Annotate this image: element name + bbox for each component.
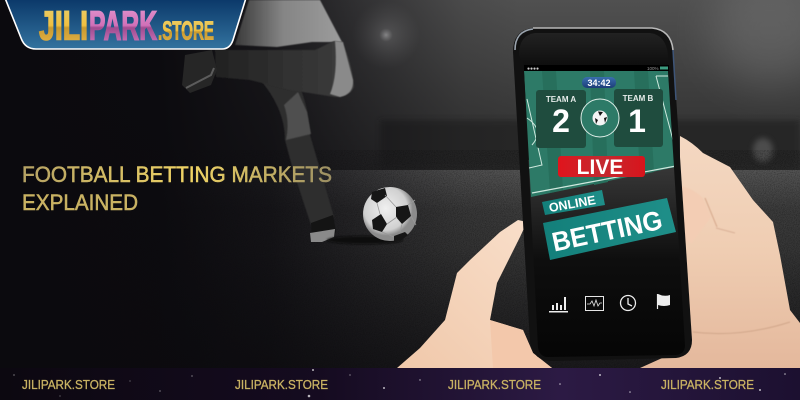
icon: clock xyxy=(620,296,636,310)
screen lower xyxy=(520,71,690,360)
title: FOOTBALL BETTING MARKETS xyxy=(22,162,332,187)
online badge: ONLINE xyxy=(548,193,597,215)
icon: flag xyxy=(658,294,670,309)
raised leg xyxy=(215,41,354,97)
icon: football xyxy=(327,187,417,244)
online badge xyxy=(542,190,605,215)
team A panel xyxy=(536,90,586,148)
logo wordmark: JILI xyxy=(39,2,88,48)
footer labels: JILIPARK.STORE xyxy=(235,378,328,392)
shorts xyxy=(235,0,342,47)
football player xyxy=(182,0,354,242)
icon: monitor xyxy=(586,296,604,310)
live badge xyxy=(558,156,645,179)
logo wordmark: PARK xyxy=(89,2,157,48)
status bar xyxy=(524,65,669,72)
team A panel: 2 xyxy=(552,103,570,139)
logo badge xyxy=(5,0,246,49)
team B panel xyxy=(614,89,663,147)
title xyxy=(22,162,332,215)
bottom fade overlay xyxy=(0,250,800,368)
phone body xyxy=(513,28,692,361)
team B panel: TEAM B xyxy=(623,94,654,103)
standing leg xyxy=(262,82,334,228)
raised boot xyxy=(182,50,217,93)
footer labels xyxy=(22,378,754,392)
footer labels: JILIPARK.STORE xyxy=(661,378,754,392)
live badge: LIVE xyxy=(577,156,623,179)
pitch xyxy=(524,71,676,197)
left hand xyxy=(397,220,552,368)
status bar: 100% xyxy=(647,66,659,71)
team B panel: 1 xyxy=(628,103,646,139)
status bar: ●●●● xyxy=(527,66,539,72)
top glass xyxy=(519,33,668,66)
stars xyxy=(13,369,786,397)
icon: bars xyxy=(549,297,568,312)
title: EXPLAINED xyxy=(22,190,138,215)
match timer: 34:42 xyxy=(587,78,611,88)
finger xyxy=(682,186,711,243)
betting badge: BETTING xyxy=(549,205,665,258)
standing boot xyxy=(311,215,336,238)
footer labels: JILIPARK.STORE xyxy=(22,378,115,392)
right hand xyxy=(640,136,800,368)
match timer xyxy=(582,77,616,88)
centre circle with ball xyxy=(581,99,619,137)
logo wordmark: .STORE xyxy=(158,16,214,46)
footer band xyxy=(0,368,800,400)
logo wordmark xyxy=(39,2,214,48)
team A panel: TEAM A xyxy=(546,95,576,104)
footer labels: JILIPARK.STORE xyxy=(448,378,541,392)
smartphone xyxy=(513,28,692,361)
